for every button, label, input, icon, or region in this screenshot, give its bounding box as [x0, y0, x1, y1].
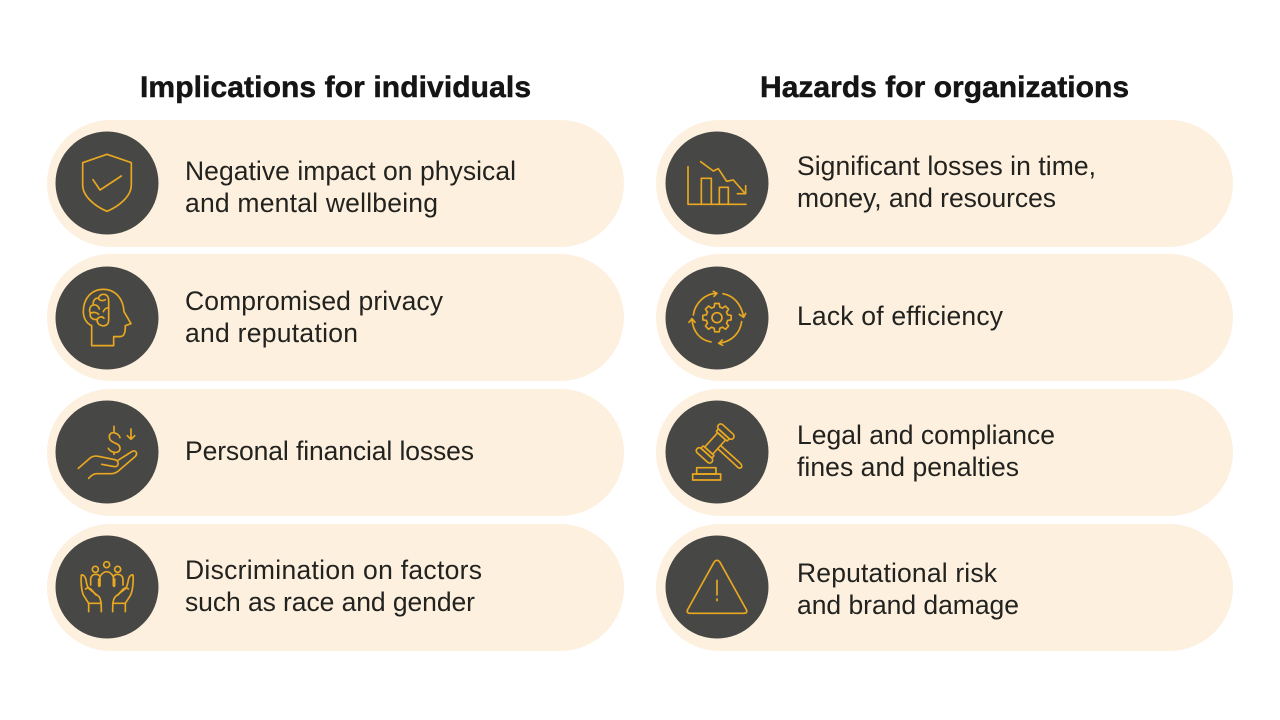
- text: discrimination: Discrimination on factors: [185, 555, 482, 585]
- panel: privacy and reputation: [47, 254, 624, 381]
- text: compromised privacy: Compromised privacy: [185, 286, 444, 316]
- icon: gavel: [693, 423, 754, 481]
- text: personal financial losses: Personal financial losses: [185, 436, 474, 466]
- text: reputational risk: Reputational risk: [797, 558, 998, 588]
- text: compromised privacy: and reputation: [185, 318, 358, 348]
- icon: hand with dollar and down arrow: [78, 426, 137, 478]
- icon: head with brain: [83, 289, 131, 346]
- panel: legal and compliance: [656, 389, 1233, 516]
- text: significant losses: Significant losses in time,: [797, 151, 1096, 181]
- text: discrimination: such as race and gender: [185, 587, 475, 617]
- text: significant losses: money, and resources: [797, 183, 1056, 213]
- panel: reputational risk: [656, 524, 1233, 651]
- heading: implications for individuals: Implications for individuals: [140, 71, 531, 104]
- panel: lack of efficiency: [656, 254, 1233, 381]
- icon: shield with check: [83, 154, 131, 211]
- panel: significant losses: [656, 120, 1233, 247]
- panel: discrimination: [47, 524, 624, 651]
- text: legal and compliance: fines and penalties: [797, 452, 1019, 482]
- text: legal and compliance: Legal and compliance: [797, 420, 1055, 450]
- heading: hazards for organizations: Hazards for organizations: [760, 71, 1129, 104]
- text: reputational risk: and brand damage: [797, 590, 1019, 620]
- text: negative impact: Negative impact on physical: [185, 156, 516, 186]
- panel: personal financial losses: [47, 389, 624, 516]
- panel: physical and mental wellbeing: [47, 120, 624, 247]
- icon: warning triangle: [687, 560, 747, 613]
- icon: gear with circular arrows: [689, 291, 746, 345]
- icon: declining bar chart: [688, 162, 746, 204]
- icon: hands holding people: [81, 562, 133, 612]
- text: negative impact: and mental wellbeing: [185, 188, 438, 218]
- text: lack of efficiency: Lack of efficiency: [797, 301, 1004, 331]
